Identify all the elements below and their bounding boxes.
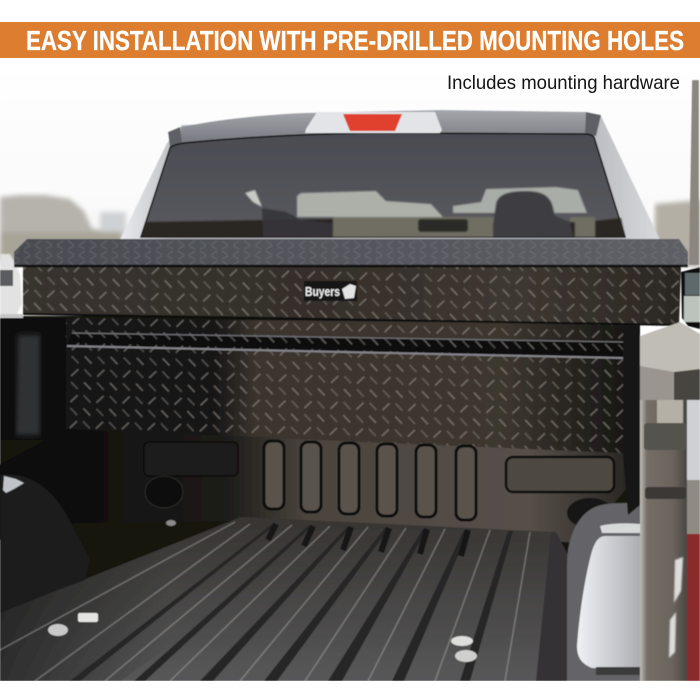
wall pocket left xyxy=(144,442,238,476)
dark base behind truck bed xyxy=(0,316,640,681)
right dark band xyxy=(495,218,625,237)
tail light xyxy=(687,534,700,681)
lid tread xyxy=(23,266,681,325)
floor bolts xyxy=(48,520,477,662)
brake light housing xyxy=(305,112,442,133)
fender bottom dark band xyxy=(596,667,640,675)
floor light ribs xyxy=(0,522,530,681)
mirror lower glass xyxy=(684,296,700,322)
background vehicle xyxy=(0,254,22,316)
wall round plug left xyxy=(145,476,183,508)
right pillar trim xyxy=(585,112,601,136)
tailgate-side fender xyxy=(567,503,640,681)
left bed wall streak xyxy=(16,335,40,435)
floor left shade xyxy=(0,517,341,681)
tree line xyxy=(0,195,120,261)
bed front wall xyxy=(0,429,640,543)
cab sides xyxy=(120,112,660,240)
dark band left xyxy=(141,219,333,237)
window: reflected seats xyxy=(141,187,625,237)
wheel well highlight xyxy=(3,476,24,493)
right seat headrest xyxy=(493,191,573,237)
tread band pattern xyxy=(67,333,623,358)
sky xyxy=(0,58,700,268)
right bolt xyxy=(455,650,477,662)
badge text: Buyers xyxy=(305,284,340,299)
pillar white smears xyxy=(669,557,683,658)
wall round plug right xyxy=(567,498,613,528)
lower box front xyxy=(66,318,624,453)
red lamp xyxy=(343,114,402,131)
side mirror xyxy=(681,267,700,329)
bed side left xyxy=(0,318,66,440)
floor dark grooves xyxy=(70,525,572,681)
rail top light xyxy=(640,322,700,374)
dash strip olive xyxy=(333,217,595,237)
tread band under lid xyxy=(67,333,623,358)
subheading: Includes mounting hardware xyxy=(447,72,680,94)
outer panel xyxy=(687,400,700,480)
outer panel lower xyxy=(687,480,700,534)
mirror frame xyxy=(681,267,700,329)
upper rail xyxy=(72,333,623,342)
utility pole xyxy=(689,80,699,265)
brand badge xyxy=(304,281,357,301)
pillar upper bright xyxy=(657,400,683,424)
left bolt xyxy=(48,624,68,636)
mirror upper glass xyxy=(685,273,700,295)
fender highlight band xyxy=(600,523,640,533)
lid top xyxy=(14,239,688,266)
distant trees right xyxy=(655,200,700,266)
cab roof band xyxy=(180,110,590,144)
rear window xyxy=(141,133,625,237)
badge logo xyxy=(342,284,356,299)
tool box xyxy=(14,239,688,453)
background vehicle window xyxy=(0,270,13,286)
brake light xyxy=(305,112,442,133)
rail right shade xyxy=(674,369,700,400)
rearview mirror xyxy=(418,219,468,232)
top banner xyxy=(0,22,700,58)
right tab xyxy=(451,636,473,646)
lid top tread xyxy=(14,239,688,266)
latch upper xyxy=(644,423,686,450)
wedges below slots xyxy=(268,524,468,556)
wall corrugation slots xyxy=(264,441,476,520)
wall pocket right xyxy=(506,457,614,492)
lower rail xyxy=(67,346,623,358)
lid underside shadow xyxy=(23,314,679,325)
bottom white margin xyxy=(0,681,700,700)
left pillar trim xyxy=(168,127,182,148)
lid edge line xyxy=(14,265,688,267)
badge plate xyxy=(304,281,357,301)
tree base xyxy=(0,232,122,260)
left seat xyxy=(262,208,333,237)
rail side face xyxy=(640,366,674,406)
banner bar xyxy=(0,22,700,58)
gap shadow xyxy=(623,325,640,515)
bed rail left highlight xyxy=(0,314,23,318)
lower box tread xyxy=(66,318,624,453)
fender chrome center xyxy=(577,536,640,668)
left wheel well xyxy=(0,474,90,613)
fender shell xyxy=(567,503,640,681)
reflection light right xyxy=(453,187,587,213)
bed side right xyxy=(623,322,700,681)
reflection glint xyxy=(245,190,262,207)
latch lower xyxy=(645,487,686,499)
left tab xyxy=(78,613,98,622)
bed floor xyxy=(0,517,571,681)
truck cab xyxy=(120,110,660,240)
far bolt xyxy=(166,520,176,526)
reflection light left xyxy=(297,191,443,217)
lid front xyxy=(23,266,681,325)
distant trees left xyxy=(0,195,126,261)
pillar xyxy=(640,400,687,681)
distant building xyxy=(100,212,126,236)
